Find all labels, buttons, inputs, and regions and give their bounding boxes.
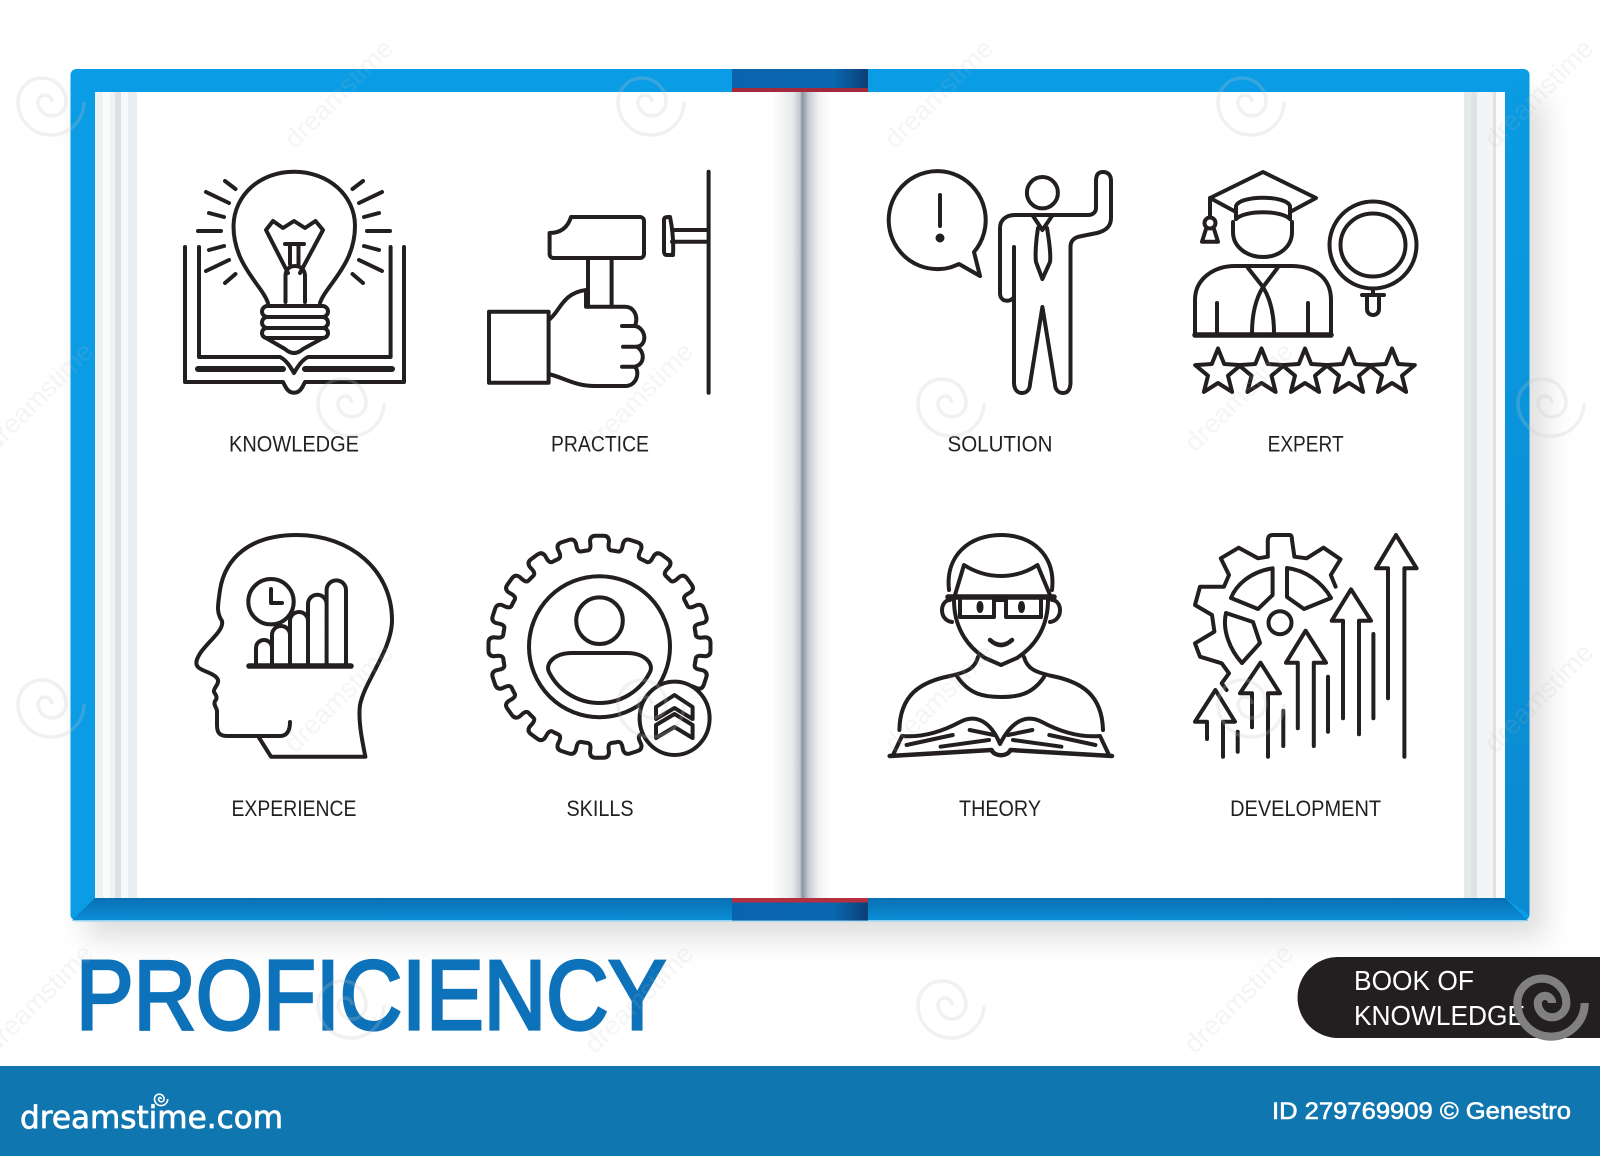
label: expert: EXPERT bbox=[1268, 432, 1344, 456]
icon: development, gear with rising arrows bbox=[1195, 535, 1417, 757]
icon: solution, person with speech bubble bbox=[889, 171, 1111, 393]
watermark text: dreamstime bbox=[1478, 637, 1599, 758]
footer bar bbox=[0, 1066, 1600, 1156]
watermark swirl on badge bbox=[1517, 979, 1585, 1037]
icon: expert, graduate with magnifier and five stars bbox=[1195, 172, 1416, 392]
label: skills: SKILLS bbox=[566, 796, 634, 821]
footer logo text: dreamstime.com bbox=[20, 1100, 283, 1136]
spine bottom bbox=[732, 898, 868, 920]
watermark text: dreamstime bbox=[278, 33, 399, 154]
icon: skills, gear with person and upgrade badge bbox=[488, 536, 710, 758]
badge text line one: BOOK OF bbox=[1354, 965, 1474, 996]
watermark text: dreamstime bbox=[1478, 33, 1599, 154]
label: practice: PRACTICE bbox=[551, 432, 649, 456]
open book bbox=[70, 69, 1530, 922]
book drop shadow bbox=[85, 100, 1545, 938]
watermark text: dreamstime bbox=[578, 336, 699, 457]
icon: theory, man with glasses reading book bbox=[890, 535, 1112, 756]
watermark text: dreamstime bbox=[878, 33, 999, 154]
badge: book of knowledge bbox=[1298, 957, 1600, 1038]
watermark text: dreamstime bbox=[578, 938, 699, 1059]
label: experience: EXPERIENCE bbox=[232, 796, 356, 821]
footer image id: ID 279769909 © Genestro bbox=[1272, 1098, 1571, 1125]
title: PROFICIENCY bbox=[76, 940, 666, 1050]
icon: experience, head with clock and bar chart bbox=[196, 535, 392, 757]
spine top bbox=[732, 69, 868, 92]
watermark text: dreamstime bbox=[278, 637, 399, 758]
left page bbox=[95, 92, 802, 898]
watermark text: dreamstime bbox=[1178, 938, 1299, 1059]
icon: practice, hand with hammer and nail bbox=[489, 172, 709, 393]
watermark text: dreamstime bbox=[878, 637, 999, 758]
book cover bbox=[70, 69, 1530, 922]
right page bbox=[802, 92, 1505, 898]
label: theory: THEORY bbox=[959, 796, 1041, 821]
badge text line two: KNOWLEDGE bbox=[1354, 1000, 1525, 1031]
icon: knowledge, light bulb over open book bbox=[185, 172, 404, 393]
watermark text: dreamstime bbox=[1178, 336, 1299, 457]
label: development: DEVELOPMENT bbox=[1230, 796, 1381, 821]
footer logo swirl bbox=[154, 1094, 168, 1106]
label: solution: SOLUTION bbox=[948, 432, 1052, 456]
label: knowledge: KNOWLEDGE bbox=[229, 432, 359, 456]
